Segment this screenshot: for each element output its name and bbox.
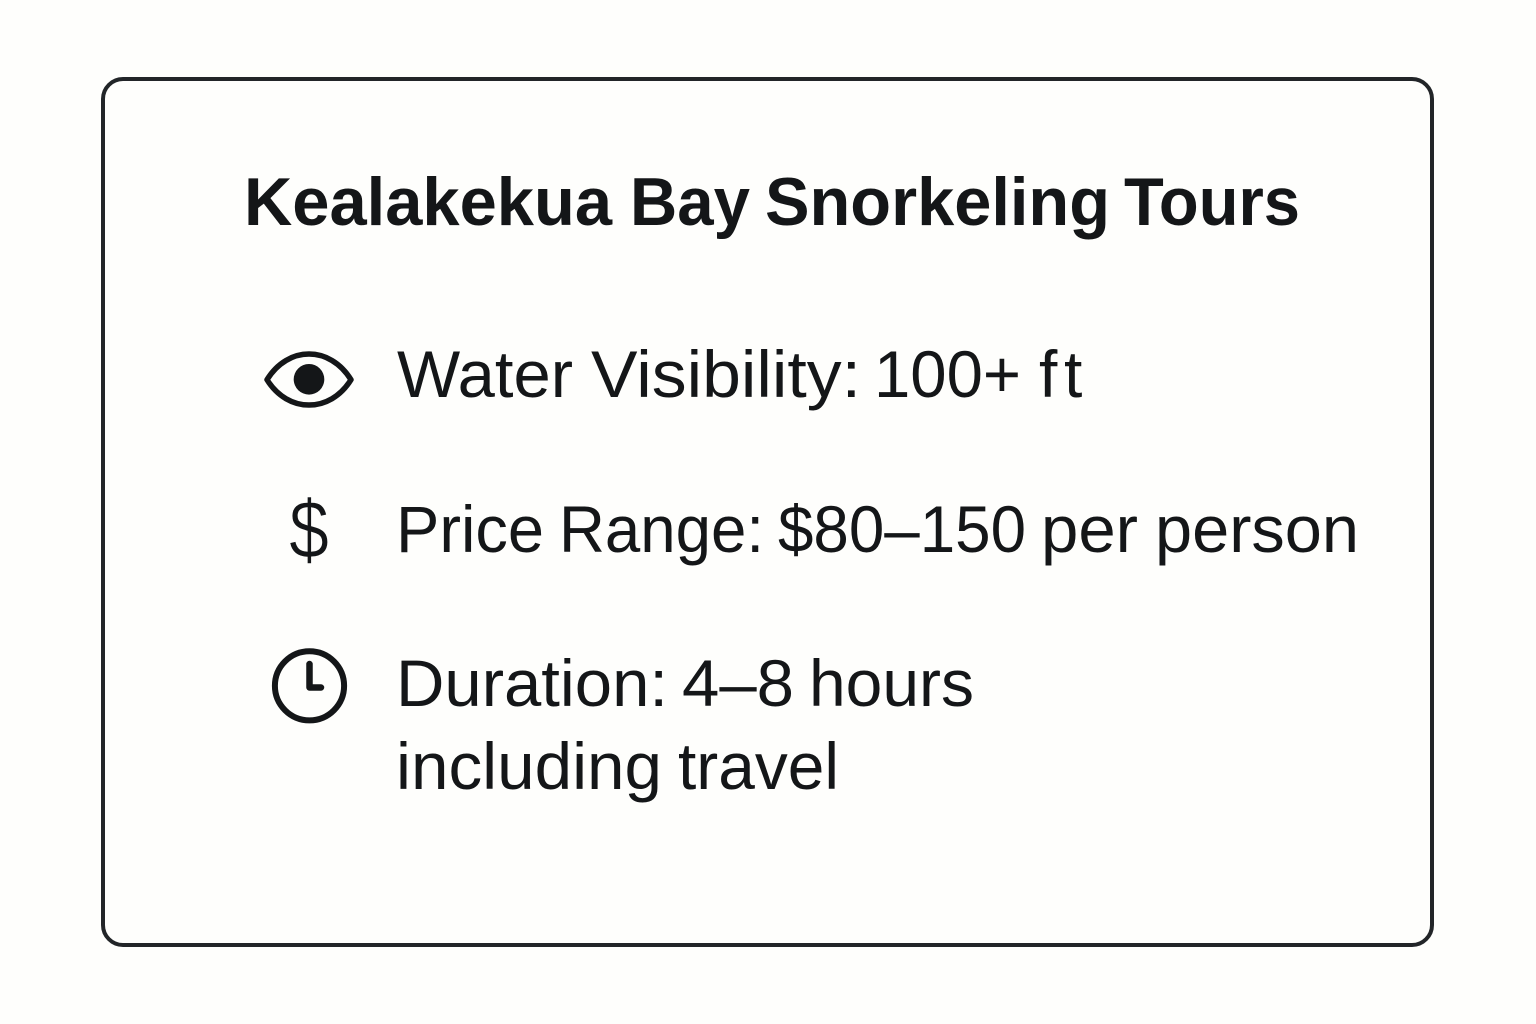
title: Snorkeling (765, 164, 1110, 240)
text: including travel (396, 729, 839, 803)
title: Kealakekua (244, 164, 613, 240)
text: water visibility: 100+ (874, 337, 1021, 411)
text: price range: person (1155, 492, 1359, 566)
title: Tours (1124, 164, 1300, 240)
text: price range: $80–150 (778, 492, 1026, 566)
panel: card (103, 79, 1432, 945)
text: duration: hours (809, 646, 974, 720)
text: including travel: including (396, 729, 662, 803)
text: price range (396, 492, 1359, 566)
text: water visibility: Visibility: (591, 337, 861, 411)
text: water visibility: Water (397, 337, 573, 411)
text: including travel: travel (678, 729, 839, 803)
text: water visibility (397, 337, 1082, 411)
icon: dollar sign: $ (289, 483, 329, 576)
text: price range: Price (396, 492, 544, 566)
icon: clock (275, 651, 344, 720)
text: water visibility: ft (1039, 337, 1082, 411)
title (244, 164, 1300, 240)
text: duration (396, 646, 974, 720)
icon: eye (267, 354, 351, 405)
text: duration: 4–8 (682, 646, 794, 720)
text: duration: Duration: (396, 646, 668, 720)
text: price range: Range: (559, 492, 764, 566)
title: Bay (630, 164, 750, 240)
text: price range: per (1041, 492, 1138, 566)
